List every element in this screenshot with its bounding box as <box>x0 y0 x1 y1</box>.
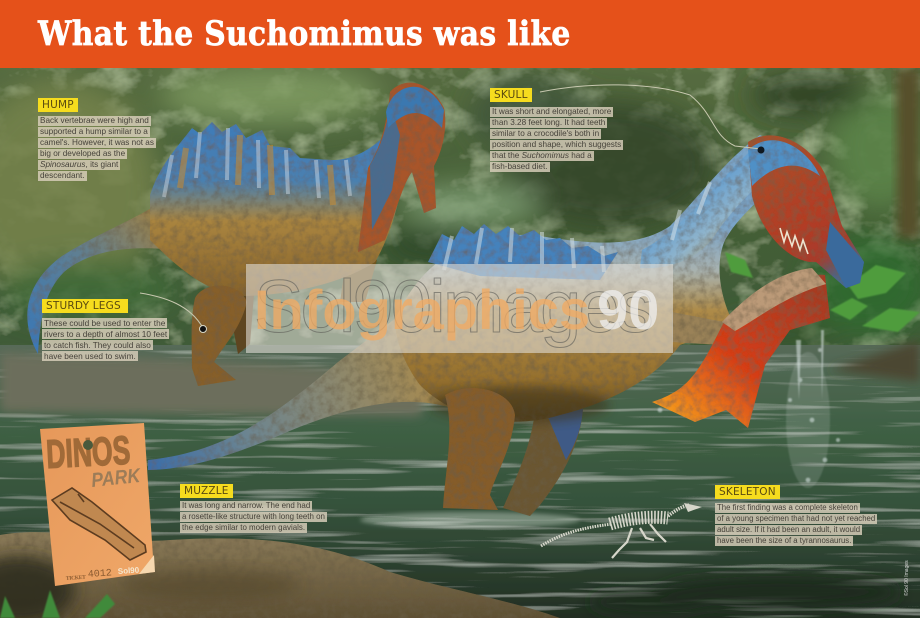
hump text: big or developed as the <box>40 149 125 158</box>
hump text: Back vertebrae were high and <box>40 116 149 125</box>
muzzle text: a rosette-like structure with long teeth on <box>182 512 325 521</box>
skull text: that the Suchomimus had a <box>492 151 592 160</box>
back spines <box>428 224 618 280</box>
skeleton text: The first finding was a complete skeleton <box>717 503 858 512</box>
skeleton illustration <box>541 503 702 558</box>
hump text: camel's. However, it was not as <box>40 138 154 147</box>
ticket logo: Sol90 <box>118 565 140 576</box>
water splash <box>658 330 840 488</box>
pointer lines <box>140 85 761 328</box>
ticket number: TICKET <box>66 575 86 582</box>
head <box>748 135 864 288</box>
sturdy legs text <box>42 318 169 361</box>
header band <box>0 0 920 68</box>
pointer dots <box>200 146 764 332</box>
skull text: It was short and elongated, more <box>492 107 611 116</box>
callout: skull <box>490 88 623 172</box>
watermark number: 90 <box>597 278 659 341</box>
muzzle label: MUZZLE <box>184 485 229 497</box>
ticket headline: DINOS <box>45 429 131 477</box>
sturdy legs text: to catch fish. They could also <box>44 340 151 350</box>
skull label <box>490 88 532 102</box>
skeleton label: SKELETON <box>719 486 776 498</box>
ticket <box>40 423 155 586</box>
far leg <box>503 398 583 516</box>
skull text: than 3.28 feet long. It had teeth <box>492 118 605 127</box>
ticket subtitle: PARK <box>90 465 143 492</box>
sturdy legs text: rivers to a depth of almost 10 feet <box>44 329 167 339</box>
neck colouring <box>640 138 800 268</box>
skeleton text: have been the size of a tyrannosaurus. <box>717 536 851 545</box>
skull text: position and shape, which suggests <box>492 140 621 149</box>
sturdy legs label: STURDY LEGS <box>46 300 121 312</box>
hump text: supported a hump similar to a <box>40 127 148 136</box>
skull text: similar to a crocodile's both in <box>492 129 599 138</box>
skull text: fish-based diet. <box>492 162 548 171</box>
arm <box>672 312 740 345</box>
neck and head <box>358 83 445 252</box>
ticket serial: 4012 <box>88 568 112 581</box>
ticket hole <box>83 440 93 450</box>
near leg <box>443 388 515 510</box>
hump text: descendant. <box>40 171 85 180</box>
hump text: Spinosaurus, its giant <box>40 160 118 169</box>
prey fish <box>652 268 830 428</box>
hump label <box>38 98 78 112</box>
rock foreground <box>0 532 560 618</box>
rear leg <box>192 286 247 386</box>
callout: hump <box>38 98 156 181</box>
title: What the Suchomimus was like <box>38 14 571 54</box>
muzzle text <box>180 501 327 533</box>
muzzle text: It was long and narrow. The end had <box>182 501 310 510</box>
watermark panel <box>246 264 673 353</box>
ticket skull sketch <box>52 488 146 560</box>
foreground dinosaur <box>148 135 864 516</box>
forest background <box>0 67 920 368</box>
watermark orange text: Infographics <box>254 278 590 341</box>
callout: skeleton <box>715 485 877 546</box>
ticket corner peel <box>139 555 155 574</box>
back dinosaur <box>27 83 445 386</box>
sturdy legs text: have been used to swim. <box>44 351 136 361</box>
muzzle text: the edge similar to modern gavials. <box>182 523 305 532</box>
sturdy legs text: These could be used to enter the <box>44 318 165 328</box>
skull label: SKULL <box>494 89 528 101</box>
belly shadow <box>430 387 610 423</box>
callout: sturdy legs <box>42 299 169 361</box>
far legs <box>228 294 254 354</box>
hump text <box>38 116 156 181</box>
skull text <box>490 107 623 172</box>
skeleton text: of a young specimen that had not yet reached <box>717 514 875 523</box>
teeth <box>780 228 808 254</box>
tail <box>27 200 175 354</box>
hump label: HUMP <box>42 99 74 111</box>
river and far bank <box>0 340 920 618</box>
body <box>395 135 812 422</box>
skeleton text: adult size. If it had been an adult, it would <box>717 525 860 534</box>
tail <box>148 296 452 470</box>
skeleton credit: ©Sol 90 Images <box>903 560 910 596</box>
body <box>150 122 408 296</box>
spine highlights <box>164 128 350 198</box>
skeleton text <box>715 503 877 546</box>
callout: muzzle <box>180 484 327 533</box>
